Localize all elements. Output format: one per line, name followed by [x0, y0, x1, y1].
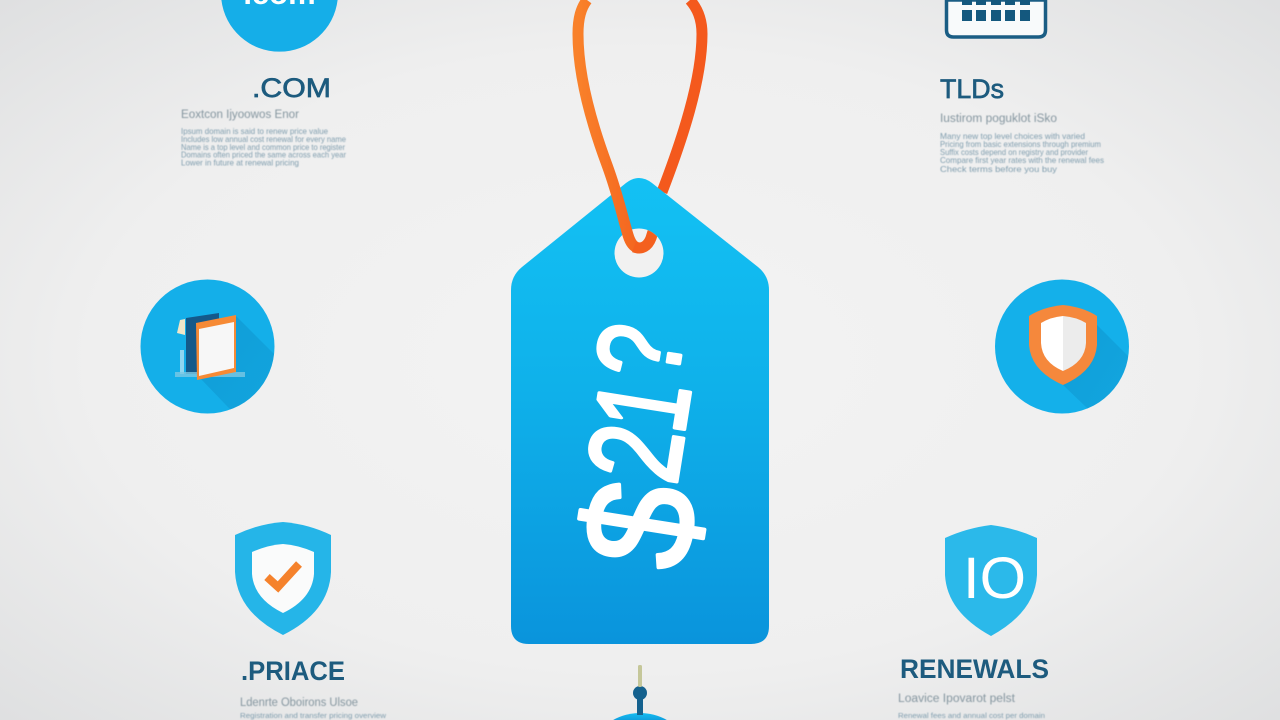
price text	[549, 316, 733, 579]
icon: IO shield: IO	[963, 546, 1026, 611]
icon: shield with check	[235, 522, 331, 635]
body text: Check terms before you buy	[940, 164, 1058, 174]
body text: Includes low annual cost renewal for every name	[181, 134, 346, 144]
body text: Pricing from basic extensions through premium	[940, 139, 1101, 149]
subtitle: Eoxtcon Ijyoowos Enor	[181, 109, 299, 121]
icon: documents circle	[140, 280, 274, 414]
heading: .PRIACE: .PRIACE	[241, 656, 345, 686]
body text: Domains often priced the same across each year	[181, 150, 346, 160]
subtitle: Ldenrte Oboirons Ulsoe	[240, 697, 358, 709]
panel: .com	[181, 0, 346, 168]
heading: RENEWALS: RENEWALS	[900, 654, 1049, 684]
icon: bottom pin circle	[613, 665, 667, 720]
body text: Many new top level choices with varied	[940, 131, 1085, 141]
subtitle: Loavice Ipovarot pelst	[898, 693, 1016, 705]
body text: Name is a top level and common price to register	[181, 142, 345, 152]
body text: Ipsum domain is said to renew price value	[181, 126, 328, 136]
tag body	[511, 178, 769, 644]
panel: RENEWALS	[898, 525, 1049, 720]
price tag with cord	[511, 0, 769, 644]
cord: loop inside hole	[634, 222, 656, 248]
heading: .COM: .COM	[252, 73, 331, 103]
icon: .com circle	[221, 0, 338, 52]
body text	[181, 126, 346, 168]
body text: Renewal fees and annual cost per domain	[898, 713, 1045, 720]
tag hole	[614, 228, 664, 278]
heading: TLDs: TLDs	[940, 74, 1004, 104]
cord: rear strand	[662, 0, 702, 192]
panel: .PRIACE	[235, 522, 387, 720]
body text: Suffix costs depend on registry and provider	[940, 147, 1088, 157]
subtitle: Iustirom poguklot iSko	[940, 113, 1057, 125]
price text: 2	[561, 415, 712, 491]
panel: TLDs	[940, 0, 1104, 174]
price text: 1	[566, 369, 719, 441]
price text: $	[549, 471, 733, 579]
price text: ?	[571, 316, 709, 387]
body text	[940, 131, 1104, 174]
icon: IO shield	[945, 525, 1037, 636]
cord: front strand	[578, 0, 640, 248]
body text: Lower in future at renewal pricing	[181, 158, 299, 168]
body text: Compare first year rates with the renewal fees	[940, 155, 1104, 165]
icon: calendar	[946, 0, 1046, 37]
icon: orange shield circle	[995, 280, 1129, 414]
body text: Registration and transfer pricing overview	[240, 713, 387, 720]
